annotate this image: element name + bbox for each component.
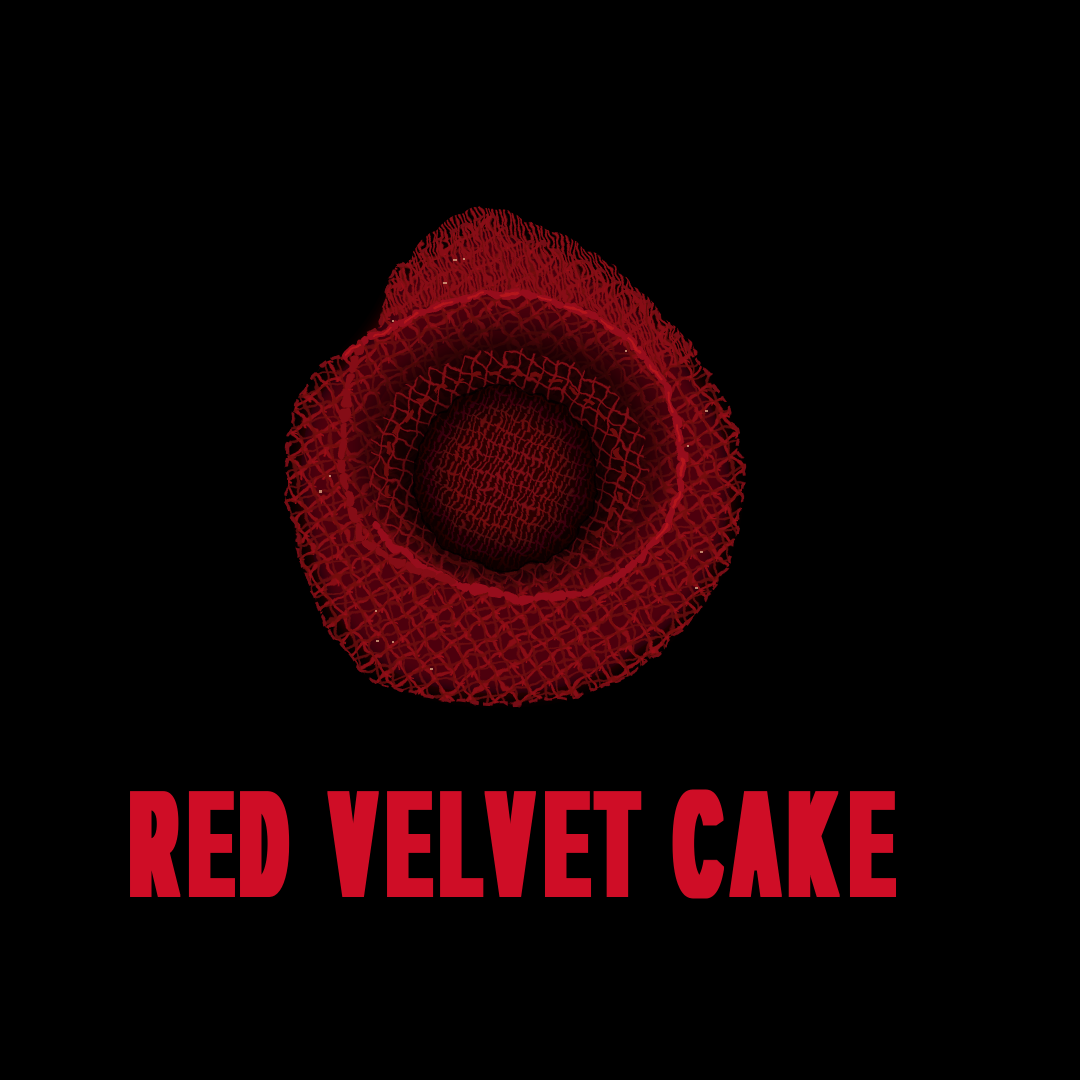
- bright ridges of the spiral roll: [343, 293, 682, 599]
- outer mesh layer base: [301, 228, 730, 693]
- inner dark band: [411, 394, 599, 570]
- dark trough around inner roll: [366, 330, 658, 574]
- outer mesh lattice: [270, 200, 760, 720]
- centre knot of threads: [413, 386, 597, 570]
- mid mesh ring: [368, 348, 650, 586]
- title: REDVELVETCAKE: [133, 760, 892, 929]
- glinting metallic flecks: [319, 258, 708, 670]
- illustration: red mesh rose: [270, 200, 760, 720]
